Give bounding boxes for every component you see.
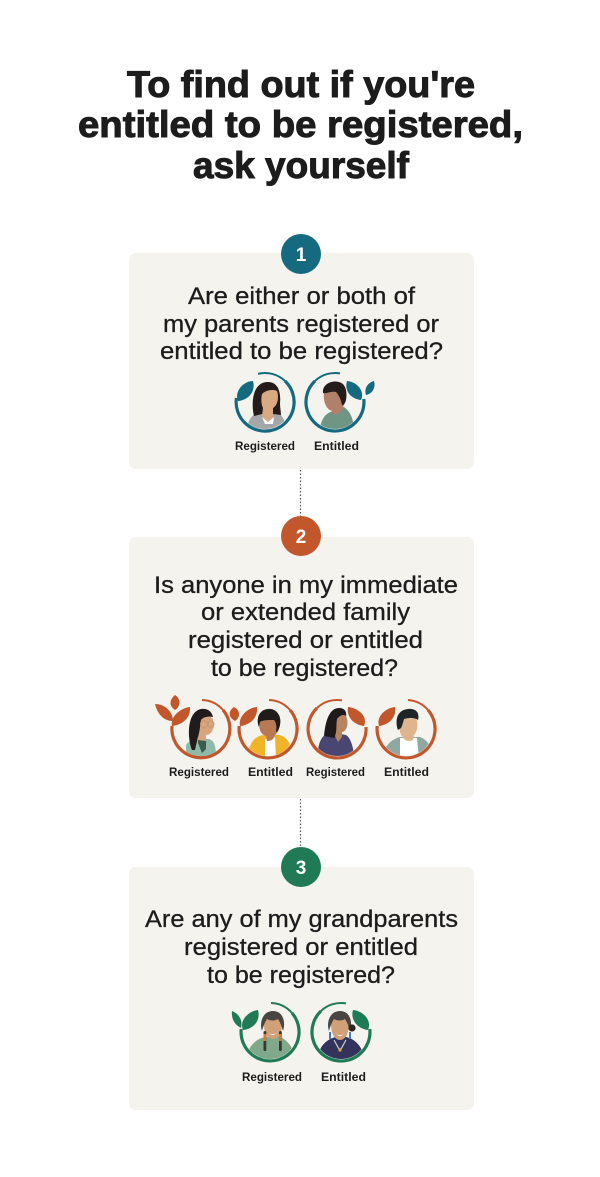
panel: step 3: [129, 847, 474, 1110]
labels: step 3: [242, 1072, 366, 1084]
labels: step 3: Registered: [242, 1072, 302, 1084]
step 3 question: Are any of my grandparents: [145, 906, 458, 933]
panel: step 2: [129, 516, 474, 798]
step 2 badge: [281, 516, 321, 556]
panel: step 1: [129, 234, 474, 469]
step 2 question: registered or entitled: [188, 627, 423, 654]
labels: step 2: Entitled: [384, 767, 429, 779]
labels: step 2: Registered: [306, 767, 365, 779]
step 1 question: entitled to be registered?: [160, 338, 443, 365]
step 1 question: [160, 283, 443, 365]
step 1 badge: 1: [296, 245, 307, 266]
step 3 question: registered or entitled: [184, 934, 418, 961]
step 2 question: Is anyone in my immediate: [154, 572, 458, 599]
avatar: entitled grandparent with necklace: [312, 1003, 370, 1062]
step 2 question: [154, 572, 458, 682]
step 2 badge: 2: [296, 527, 306, 548]
avatar: registered relative in purple top: [308, 700, 366, 759]
step 3 badge: 3: [296, 858, 306, 879]
labels: step 2: Registered: [169, 767, 229, 779]
title: entitled to be registered,: [78, 104, 523, 145]
avatar: registered relative with glasses: [155, 695, 230, 759]
title: ask yourself: [193, 145, 410, 186]
avatar: entitled relative in yellow jacket: [230, 700, 297, 759]
step 3 question: [145, 906, 458, 989]
step 1 question: my parents registered or: [163, 311, 439, 338]
step 1 question: Are either or both of: [188, 283, 415, 310]
step 2 question: to be registered?: [211, 655, 398, 682]
title: [78, 64, 523, 186]
labels: step 3: Entitled: [321, 1072, 366, 1084]
step 3 badge: [281, 847, 321, 887]
avatar: registered grandparent with braids: [232, 1003, 299, 1062]
labels: step 2: [169, 767, 429, 779]
step 3 question: to be registered?: [207, 962, 395, 989]
title: To find out if you're: [127, 64, 475, 105]
labels: step 1: Entitled: [314, 441, 359, 453]
avatar: entitled relative in grey jacket: [377, 700, 435, 759]
step 1 badge: [281, 234, 321, 274]
labels: step 2: Entitled: [248, 767, 293, 779]
avatar: entitled parent: [306, 373, 375, 432]
avatar: registered parent: [236, 373, 294, 432]
labels: step 1: [235, 441, 359, 453]
labels: step 1: Registered: [235, 441, 295, 453]
step 2 question: or extended family: [201, 599, 410, 626]
leaf: [365, 381, 375, 395]
